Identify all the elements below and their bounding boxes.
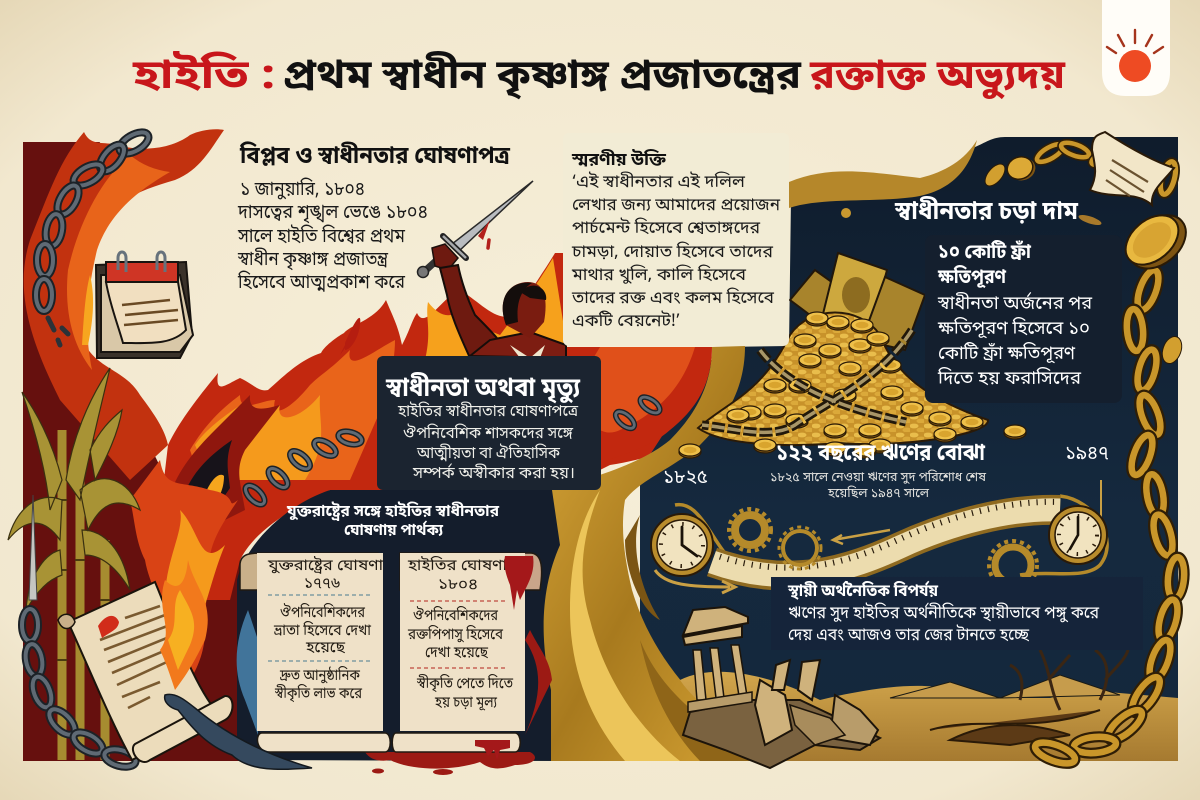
icon: timeline arrows bbox=[655, 480, 1101, 593]
panel: US declaration scroll: স্বীকৃতি লাভ করে bbox=[274, 683, 363, 705]
panel: Haiti declaration scroll: হাইতির ঘোষণা bbox=[407, 555, 508, 577]
text: years and debt heading: ১২২ বছরের ঋণের বোঝা bbox=[776, 440, 985, 470]
title bbox=[132, 52, 1066, 105]
icon: paper scroll top right bbox=[1090, 132, 1174, 205]
text: revolution body: দাসত্বের শৃঙ্খল ভেঙে ১৮০৪ bbox=[237, 201, 428, 226]
text: years and debt heading: হয়েছিল ১৯৪৭ সালে bbox=[827, 485, 929, 503]
heading: revolution and declaration: বিপ্লব ও স্বাধীনতার ঘোষণাপত্র bbox=[239, 141, 510, 173]
text: years and debt heading: ১৮২৫ সালে নেওয়া ঋণের সুদ পরিশোধ শেষ bbox=[770, 469, 987, 487]
panel: permanent economic disaster box: স্থায়ী অর্থনৈতিক বিপর্যয় bbox=[787, 580, 939, 603]
logo: sun badge bbox=[1102, 0, 1170, 96]
icon: bank notes bbox=[790, 253, 925, 350]
panel: cost of freedom navy right side bbox=[640, 137, 1178, 761]
text: revolution body bbox=[237, 177, 428, 296]
panel: Haiti declaration scroll: হয় চড়া মূল্য bbox=[434, 694, 498, 714]
icon: gears bbox=[729, 509, 1037, 589]
illustration: debt timeline ruler with clocks bbox=[651, 480, 1107, 593]
panel: orange flame beside scrolls bbox=[130, 460, 238, 680]
panel: desert landscape bbox=[680, 650, 1178, 761]
icon: left iron chain bbox=[36, 128, 152, 345]
panel: gold swirl divider bbox=[544, 140, 977, 761]
heading: differences between declarations bbox=[286, 501, 499, 542]
illustration: rebel raising sword bbox=[418, 181, 566, 358]
icon: chain binding the pile bbox=[702, 330, 912, 432]
illustration: sugarcane bbox=[8, 368, 140, 760]
panel: memorable quote bbox=[563, 133, 789, 346]
title: প্রথম স্বাধীন কৃষ্ণাঙ্গ প্রজাতন্ত্রের bbox=[283, 52, 802, 105]
panel: US declaration scroll bbox=[240, 553, 390, 752]
panel: US declaration scroll: যুক্তরাষ্ট্রের ঘোষণা bbox=[267, 555, 384, 577]
icon: right clock bbox=[1049, 506, 1107, 564]
icon: coin mound bbox=[698, 312, 988, 445]
panel: Haiti declaration scroll: রক্তপিপাসু হিসেবে bbox=[407, 624, 504, 646]
panel: central dark background bbox=[237, 490, 566, 761]
icon: broken chain in fire bbox=[242, 429, 363, 508]
text: revolution body: স্বাধীন কৃষ্ণাঙ্গ প্রজাতন্ত্র bbox=[237, 247, 388, 273]
panel: US declaration scroll: হয়েছে bbox=[305, 639, 346, 659]
panel: freedom or death: হাইতির স্বাধীনতার ঘোষণাপত্রে bbox=[397, 401, 578, 423]
panel: freedom or death: স্বাধীনতা অথবা মৃত্যু bbox=[385, 371, 581, 407]
panel: memorable quote: মাথার খুলি, কালি হিসেবে bbox=[571, 264, 747, 287]
panel: indemnity box: ১০ কোটি ফ্রাঁ bbox=[938, 239, 1031, 267]
illustration: gold coin pile with bills and chains bbox=[679, 253, 1026, 458]
icon: coins bbox=[679, 312, 1026, 458]
heading: differences between declarations: ঘোষণায় পার্থক্য bbox=[344, 520, 443, 542]
heading: differences between declarations: যুক্তরাষ্ট্রের সঙ্গে হাইতির স্বাধীনতার bbox=[286, 501, 499, 523]
panel: indemnity box bbox=[925, 235, 1122, 403]
panel: freedom or death: আত্মীয়তা বা ঐতিহাসিক bbox=[416, 443, 561, 465]
panel: Haiti declaration scroll: ঔপনিবেশিকদের bbox=[413, 605, 499, 627]
illustration: blue and red flames beside scrolls bbox=[237, 610, 552, 735]
icon: top chain with coins bbox=[841, 140, 1121, 227]
title: রক্তাক্ত অভ্যুদয় bbox=[809, 52, 1066, 105]
panel: memorable quote: স্মরণীয় উক্তি bbox=[571, 149, 666, 172]
text: revolution body: ১ জানুয়ারি, ১৮০৪ bbox=[240, 177, 365, 203]
panel: US declaration scroll: ভ্রাতা হিসেবে দেখা bbox=[273, 620, 372, 642]
icon: sword bbox=[29, 495, 37, 600]
panel: indemnity box: কোটি ফ্রাঁ ক্ষতিপূরণ bbox=[938, 341, 1076, 367]
panel: memorable quote: ‘এই স্বাধীনতার এই দলিল bbox=[572, 171, 746, 194]
panel: Haiti declaration scroll: ১৮০৪ bbox=[438, 576, 478, 596]
panel: memorable quote: চামড়া, দোয়াত হিসেবে তাদের bbox=[571, 241, 774, 264]
panel: Haiti declaration scroll bbox=[392, 553, 542, 760]
panel: US declaration scroll: ঔপনিবেশিকদের bbox=[280, 602, 366, 624]
panel: indemnity box: দিতে হয় ফরাসিদের bbox=[937, 366, 1082, 392]
panel: revolution fire, left side bbox=[23, 129, 720, 761]
text: years and debt heading bbox=[663, 440, 1109, 503]
icon: ruined temple bbox=[683, 607, 880, 768]
panel: indemnity box: ক্ষতিপূরণ হিসেবে ১০ bbox=[937, 316, 1090, 342]
panel: Haiti declaration scroll: দেখা হয়েছে bbox=[425, 644, 488, 664]
panel: permanent economic disaster box: ঋণের সুদ হাইতির অর্থনীতিকে স্থায়ীভাবে পঙ্গু করে bbox=[788, 601, 1100, 625]
panel: Haiti declaration scroll: স্বীকৃতি পেতে দিতে bbox=[416, 673, 514, 695]
panel: US declaration scroll: ১৭৭৬ bbox=[304, 575, 340, 595]
panel: memorable quote: একটি বেয়নেট!’ bbox=[572, 310, 680, 333]
panel: indemnity box: ক্ষতিপূরণ bbox=[937, 264, 1007, 292]
panel: permanent economic disaster box bbox=[771, 577, 1143, 650]
text: revolution body: হিসেবে আত্মপ্রকাশ করে bbox=[237, 270, 406, 296]
panel: freedom or death: সম্পর্ক অস্বীকার করা হয়। bbox=[412, 463, 575, 485]
panel: permanent economic disaster box: দেয় এবং আজও তার জের টানতে হচ্ছে bbox=[788, 624, 1030, 647]
icon: slate quill over scroll bbox=[165, 694, 312, 769]
heading: cost of freedom: স্বাধীনতার চড়া দাম bbox=[894, 196, 1078, 230]
text: revolution body: সালে হাইতি বিশ্বের প্রথম bbox=[237, 224, 405, 250]
icon: calendar bbox=[96, 252, 193, 358]
illustration: burning declaration scroll bbox=[58, 560, 232, 762]
panel: memorable quote: তাদের রক্ত এবং কলম হিসেবে bbox=[571, 287, 775, 310]
panel: freedom or death: ঔপনিবেশিক শাসকদের সঙ্গে bbox=[403, 423, 574, 445]
panel: indemnity box: স্বাধীনতা অর্জনের পর bbox=[937, 291, 1093, 317]
panel: US declaration scroll: দ্রুত আনুষ্ঠানিক bbox=[279, 664, 360, 687]
icon: gold chain right border bbox=[1033, 160, 1196, 768]
icon: blood drips bbox=[475, 556, 533, 760]
panel: memorable quote: পার্চমেন্ট হিসেবে শ্বেতাঙ্গদের bbox=[572, 216, 761, 240]
panel: freedom or death bbox=[377, 356, 601, 490]
title: হাইতি : bbox=[132, 52, 275, 105]
icon: yellow flame bbox=[165, 510, 225, 650]
icon: left clock bbox=[651, 514, 713, 576]
icon: lower left iron chain bbox=[22, 609, 138, 770]
panel: memorable quote: লেখার জন্য আমাদের প্রয়োজন bbox=[572, 194, 781, 217]
icon: small broken chain bbox=[613, 394, 662, 431]
text: years and debt heading: ১৮২৫ bbox=[663, 466, 708, 491]
text: years and debt heading: ১৯৪৭ bbox=[1065, 442, 1109, 467]
icon: blood pool bbox=[365, 752, 535, 775]
